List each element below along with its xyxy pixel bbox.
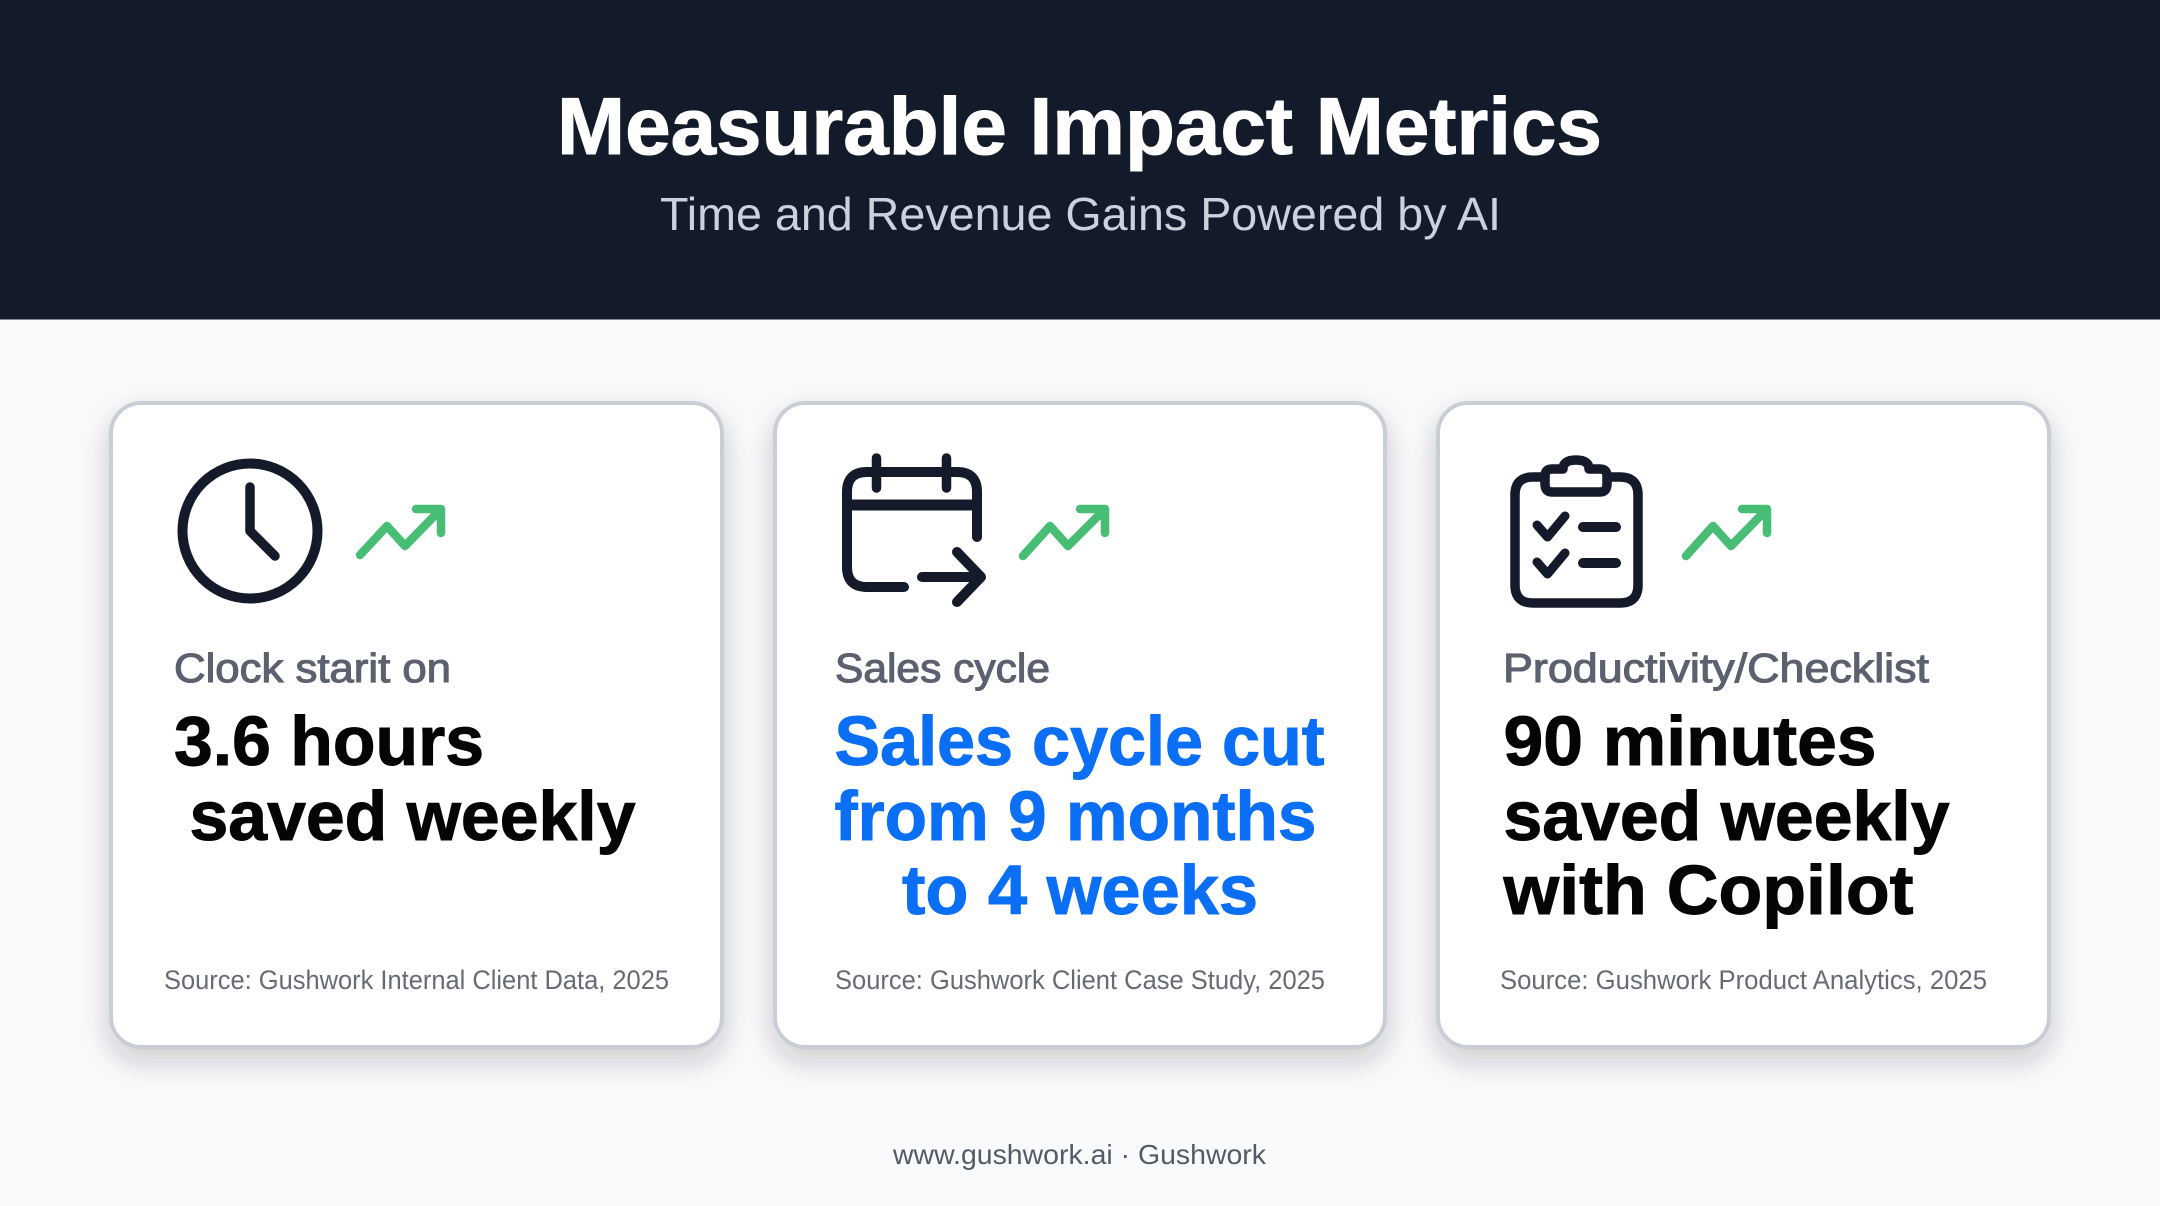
title: Measurable Impact Metrics <box>557 82 1602 172</box>
metric: 3.6 hours saved weekly: 3.6 hours <box>174 702 484 780</box>
label: productivity: Productivity/Checklist <box>1503 645 1930 691</box>
icon: calendar with arrow <box>847 458 981 602</box>
icon: clock <box>182 464 318 598</box>
source: card 1: Source: Gushwork Internal Client Data, 2025 <box>164 965 669 995</box>
subtitle: Time and Revenue Gains Powered by AI <box>660 188 1501 240</box>
icon: clipboard checklist <box>1515 460 1638 603</box>
panel: card 3 checklist <box>1438 403 2049 1047</box>
icon: trend arrow <box>360 509 441 555</box>
label: clock: Clock starit on <box>174 645 451 691</box>
panel: card 1 clock <box>111 403 722 1047</box>
source: card 3: Source: Gushwork Product Analytics, 2025 <box>1500 965 1987 995</box>
metric: sales cycle cut: to 4 weeks <box>902 851 1258 929</box>
metric: 90 minutes: saved weekly <box>1504 777 1950 855</box>
panel: card 2 calendar <box>775 403 1385 1047</box>
metric: 3.6 hours saved weekly <box>174 702 636 855</box>
metric: 3.6 hours saved weekly: saved weekly <box>190 777 636 855</box>
icon: trend arrow <box>1686 509 1767 556</box>
icon: trend arrow <box>1023 509 1105 556</box>
metric: 90 minutes <box>1502 702 1950 929</box>
source: card 2: Source: Gushwork Client Case Study, 2025 <box>835 965 1325 995</box>
metric: sales cycle cut <box>834 702 1324 929</box>
metric: 90 minutes: with Copilot <box>1502 851 1914 929</box>
footer: www.gushwork.ai · Gushwork <box>892 1139 1267 1170</box>
header band <box>0 0 2160 320</box>
label: sales cycle: Sales cycle <box>835 645 1050 691</box>
metric: 90 minutes: 90 minutes <box>1504 702 1876 780</box>
metric: sales cycle cut: Sales cycle cut <box>834 702 1324 780</box>
metric: sales cycle cut: from 9 months <box>834 777 1316 855</box>
